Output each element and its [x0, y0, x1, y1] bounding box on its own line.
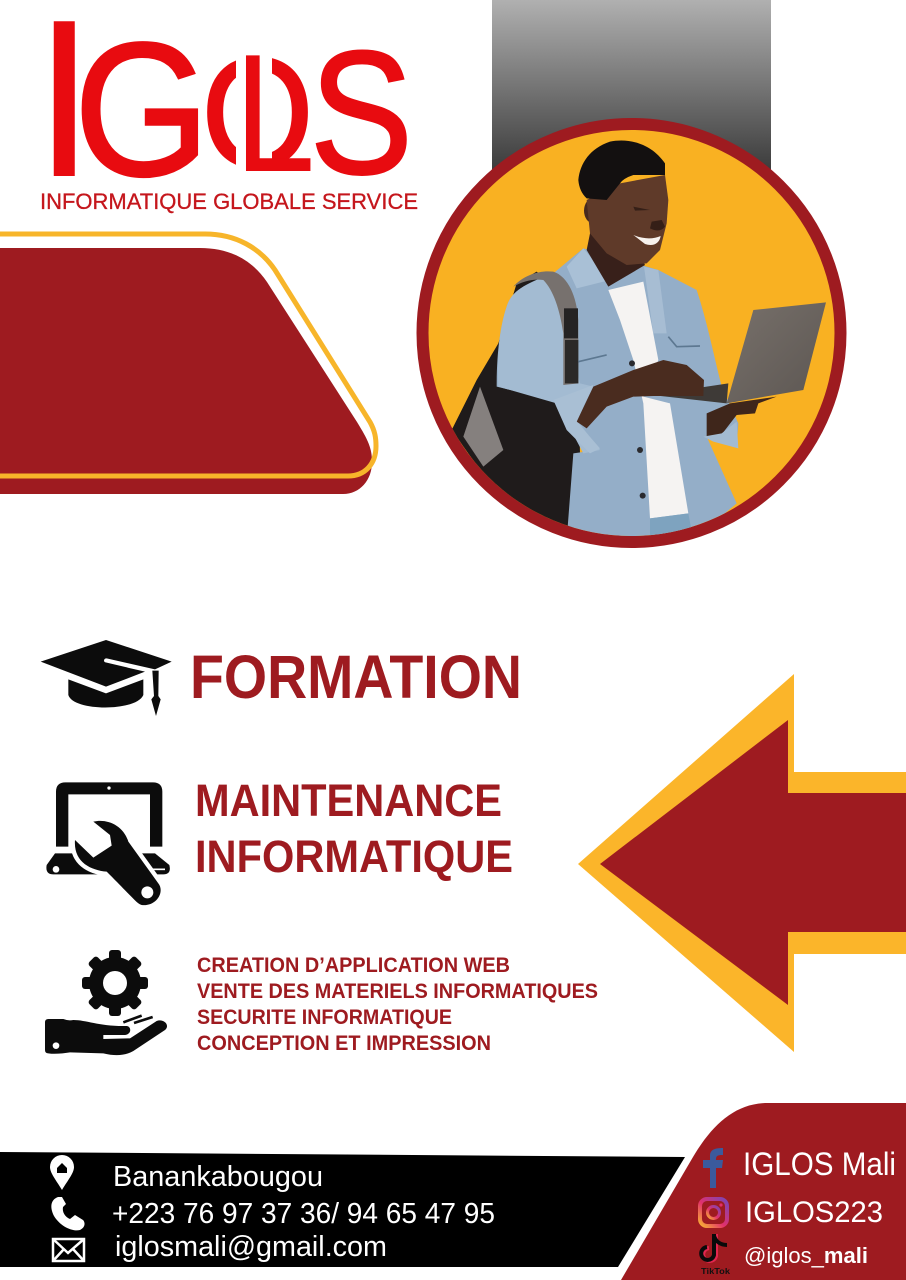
panel: black contact bar — [0, 1152, 685, 1267]
jeans — [650, 513, 691, 536]
backpack — [452, 272, 580, 530]
neck — [587, 233, 645, 287]
ear — [584, 202, 589, 222]
logo — [33, 0, 418, 224]
icon: tiktok: TikTok — [701, 1267, 731, 1276]
left forearm and typing hand — [577, 360, 704, 428]
icon: envelope — [53, 1239, 84, 1261]
face — [587, 175, 668, 265]
jacket — [497, 248, 738, 540]
right forearm and hand under laptop — [707, 397, 777, 437]
icon: hand holding gear — [45, 950, 167, 1055]
hair — [578, 141, 665, 200]
icon: instagram — [700, 1199, 727, 1226]
text block: other services: CREATION D’APPLICATION WEB — [197, 954, 510, 977]
left rolled cuff — [553, 385, 600, 453]
logo wordmark: S — [310, 15, 413, 210]
t-shirt — [608, 282, 688, 518]
text block: other services: SECURITE INFORMATIQUE — [197, 1006, 452, 1029]
icon: tiktok — [701, 1234, 731, 1276]
eye and nose shadow — [633, 207, 665, 230]
arrow pointing left — [578, 674, 906, 1052]
text: address: Banankabougou — [113, 1161, 323, 1193]
grey gradient band — [492, 0, 771, 170]
panel: red social media corner — [621, 1103, 906, 1280]
heading: maintenance informatique: INFORMATIQUE — [195, 831, 513, 882]
icon: phone — [51, 1197, 85, 1230]
backpack strap — [513, 271, 578, 385]
text: email: iglosmali@gmail.com — [115, 1231, 387, 1263]
text block: other services: CONCEPTION ET IMPRESSION — [197, 1032, 491, 1055]
text: instagram name: IGLOS223 — [745, 1196, 883, 1229]
logo wordmark: L — [234, 19, 315, 207]
icon: laptop with wrench — [46, 782, 170, 905]
photo: student with laptop in circle — [422, 124, 840, 542]
panel: red banner with yellow outline — [0, 234, 376, 494]
collar — [566, 248, 605, 288]
text block: other services — [197, 954, 598, 1055]
heading: formation: FORMATION — [190, 643, 522, 711]
icon: graduation cap — [41, 640, 172, 716]
heading: maintenance informatique: MAINTENANCE — [195, 775, 502, 826]
logo wordmark: G — [74, 3, 210, 216]
smile — [633, 235, 661, 245]
pocket flaps and buttons — [668, 337, 700, 347]
logo subtitle: INFORMATIQUE GLOBALE SERVICE — [40, 189, 418, 214]
text: tiktok handle: @iglos_mali — [744, 1243, 868, 1268]
text: facebook name: IGLOS Mali — [743, 1146, 896, 1182]
laptop — [727, 302, 826, 403]
icon: facebook — [703, 1148, 723, 1188]
text: phone numbers: +223 76 97 37 36/ 94 65 47 95 — [112, 1198, 495, 1230]
icon: location pin — [50, 1155, 74, 1190]
heading: maintenance informatique — [195, 775, 513, 882]
logo wordmark: O — [202, 26, 314, 199]
text block: other services: VENTE DES MATERIELS INFORMATIQUES — [197, 980, 598, 1003]
right cuff — [703, 422, 738, 448]
logo wordmark — [33, 0, 413, 224]
